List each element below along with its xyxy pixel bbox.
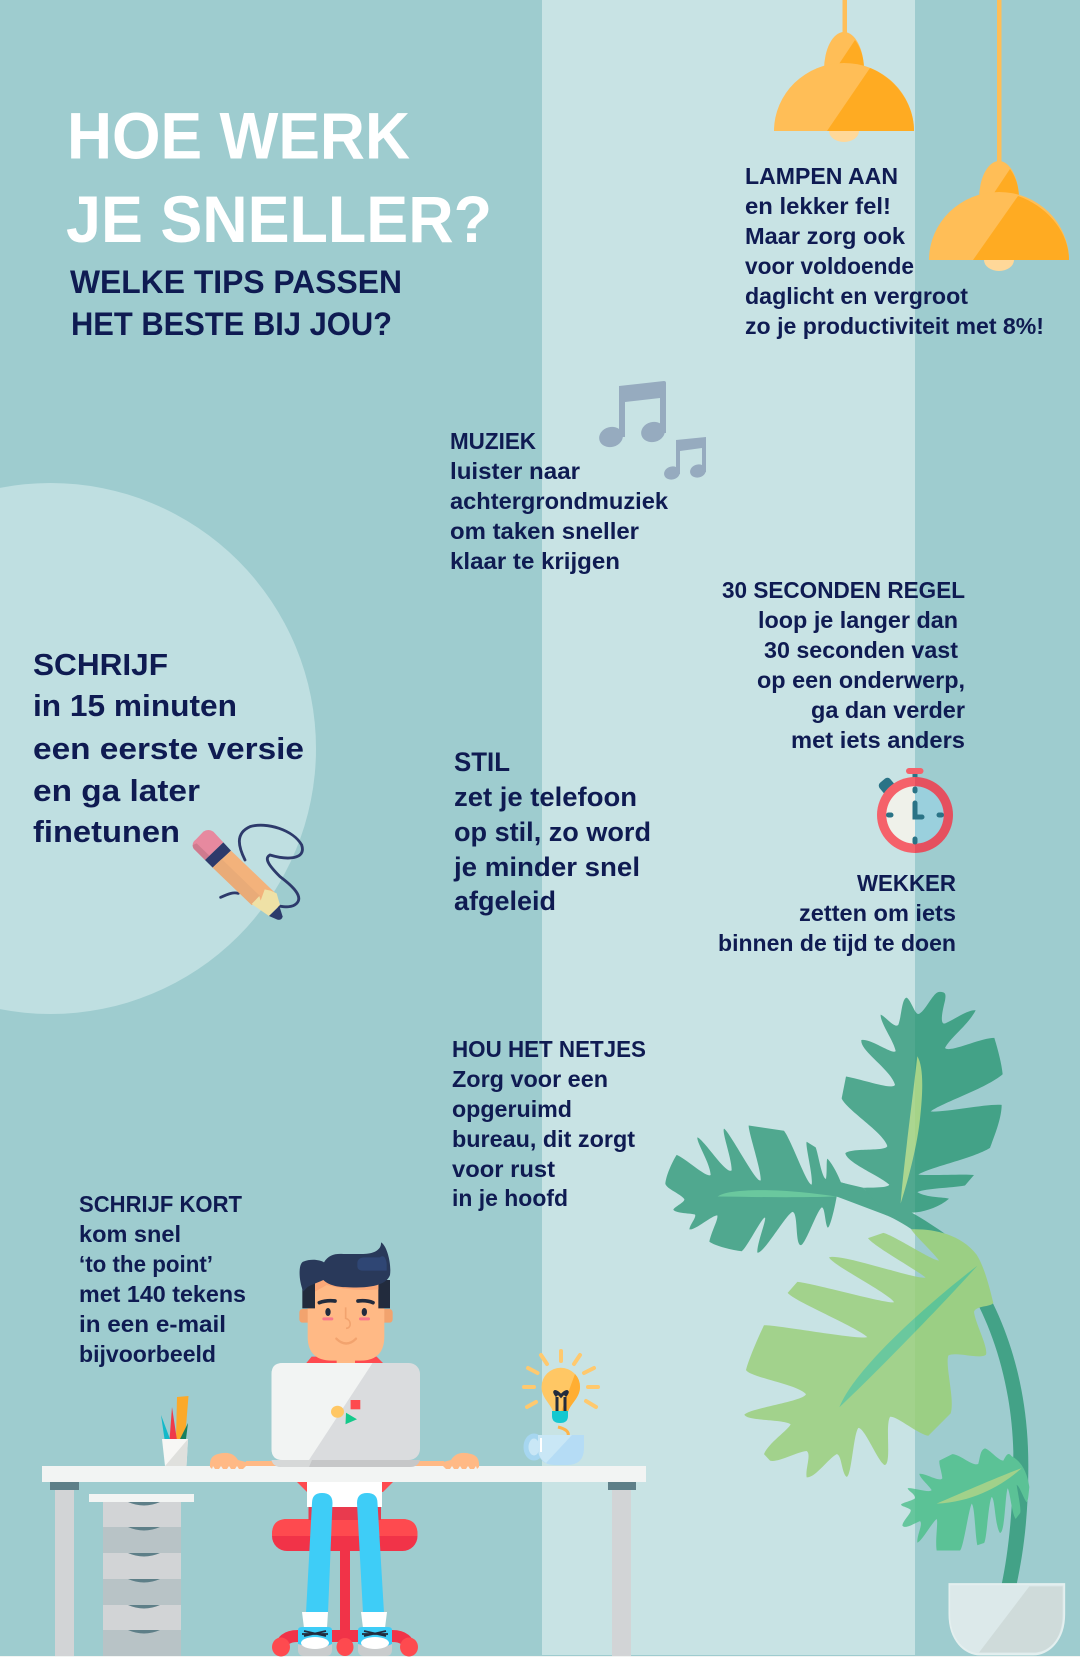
leaf: large light xyxy=(744,1229,993,1477)
text: hou het netjes: HOU HET NETJES xyxy=(452,1036,646,1062)
text: muziek: klaar te krijgen xyxy=(450,548,620,574)
text: muziek: om taken sneller xyxy=(450,518,639,544)
text: schrijf in 15 minuten: en ga later xyxy=(33,774,200,808)
plant pot xyxy=(949,1584,1064,1654)
text: muziek: achtergrondmuziek xyxy=(450,488,668,514)
text: wekker: binnen de tijd te doen xyxy=(718,930,956,956)
subtitle: HET BESTE BIJ JOU? xyxy=(71,306,392,342)
desk legs and drawers xyxy=(50,1482,636,1656)
text: schrijf kort: bijvoorbeeld xyxy=(79,1341,216,1367)
leaf: left xyxy=(665,1126,887,1253)
text: hou het netjes xyxy=(452,1036,646,1211)
plant xyxy=(665,992,1064,1654)
text: schrijf kort: SCHRIJF KORT xyxy=(79,1191,242,1217)
plant stem xyxy=(837,1182,1028,1584)
title: JE SNELLER? xyxy=(66,182,492,256)
text: lampen aan: voor voldoende xyxy=(745,253,914,279)
text: schrijf kort xyxy=(79,1191,246,1367)
text: hou het netjes: opgeruimd xyxy=(452,1096,572,1122)
text: hou het netjes: voor rust xyxy=(452,1156,555,1182)
panel: light circle xyxy=(0,483,316,1014)
text: wekker: WEKKER xyxy=(857,870,956,896)
text: lampen aan: zo je productiviteit met 8%! xyxy=(745,313,1044,339)
man: shoes xyxy=(298,1612,392,1656)
desk top xyxy=(42,1466,646,1482)
text: schrijf in 15 minuten: SCHRIJF xyxy=(33,648,168,682)
text: stil: je minder snel xyxy=(453,852,640,882)
title xyxy=(66,98,492,256)
text: stil: op stil, zo word xyxy=(454,817,651,847)
text: stil: afgeleid xyxy=(454,886,556,916)
chair xyxy=(272,1519,418,1656)
text: schrijf kort: met 140 tekens xyxy=(79,1281,246,1307)
text: schrijf in 15 minuten xyxy=(33,648,304,849)
icon: coffee cup xyxy=(526,1427,584,1465)
text: 30 seconden regel: loop je langer dan xyxy=(758,607,958,633)
icon: pencil with squiggle xyxy=(193,825,302,920)
man: legs xyxy=(306,1493,384,1613)
text: 30 seconden regel: 30 seconden vast xyxy=(764,637,958,663)
text: muziek: MUZIEK xyxy=(450,428,536,454)
text: lampen aan: daglicht en vergroot xyxy=(745,283,968,309)
text: lampen aan: Maar zorg ook xyxy=(745,223,905,249)
icon: right lamp xyxy=(929,0,1069,271)
text: schrijf in 15 minuten: finetunen xyxy=(33,815,180,849)
text: stil: STIL xyxy=(454,747,510,777)
text: stil xyxy=(453,747,651,916)
text: 30 seconden regel xyxy=(722,577,965,753)
man: torso xyxy=(297,1482,393,1520)
text: lampen aan: LAMPEN AAN xyxy=(745,163,898,189)
subtitle: WELKE TIPS PASSEN xyxy=(70,264,402,300)
icon: light bulb xyxy=(524,1351,598,1423)
leaf veins xyxy=(718,1056,1022,1504)
text: lampen aan xyxy=(745,163,1044,339)
character: man xyxy=(297,1242,393,1656)
text: hou het netjes: bureau, dit zorgt xyxy=(452,1126,635,1152)
icon: music notes xyxy=(597,381,707,481)
text: 30 seconden regel: op een onderwerp, xyxy=(757,667,965,693)
text: schrijf kort: in een e-mail xyxy=(79,1311,226,1337)
icon: left lamp xyxy=(774,0,914,142)
text: muziek: luister naar xyxy=(450,458,580,484)
icon: stopwatch xyxy=(877,768,953,853)
text: schrijf in 15 minuten: in 15 minuten xyxy=(33,689,237,723)
text: 30 seconden regel: met iets anders xyxy=(791,727,965,753)
subtitle xyxy=(70,264,402,342)
text: schrijf kort: kom snel xyxy=(79,1221,181,1247)
leaf: small xyxy=(901,1448,1029,1550)
text: wekker: zetten om iets xyxy=(799,900,956,926)
text: schrijf in 15 minuten: een eerste versie xyxy=(33,732,304,766)
title: HOE WERK xyxy=(67,98,410,172)
text: muziek xyxy=(450,428,668,574)
man: hands xyxy=(210,1453,479,1469)
laptop xyxy=(272,1363,420,1467)
pen cup with pens and ruler xyxy=(161,1396,188,1466)
man: head xyxy=(299,1242,393,1363)
text: schrijf kort: ‘to the point’ xyxy=(79,1251,213,1277)
leaf: top xyxy=(842,992,1003,1215)
text: wekker xyxy=(718,870,956,956)
text: hou het netjes: in je hoofd xyxy=(452,1185,568,1211)
text: lampen aan: en lekker fel! xyxy=(745,193,891,219)
text: stil: zet je telefoon xyxy=(454,782,637,812)
text: hou het netjes: Zorg voor een xyxy=(452,1066,608,1092)
text: 30 seconden regel: 30 SECONDEN REGEL xyxy=(722,577,965,603)
text: 30 seconden regel: ga dan verder xyxy=(811,697,965,723)
